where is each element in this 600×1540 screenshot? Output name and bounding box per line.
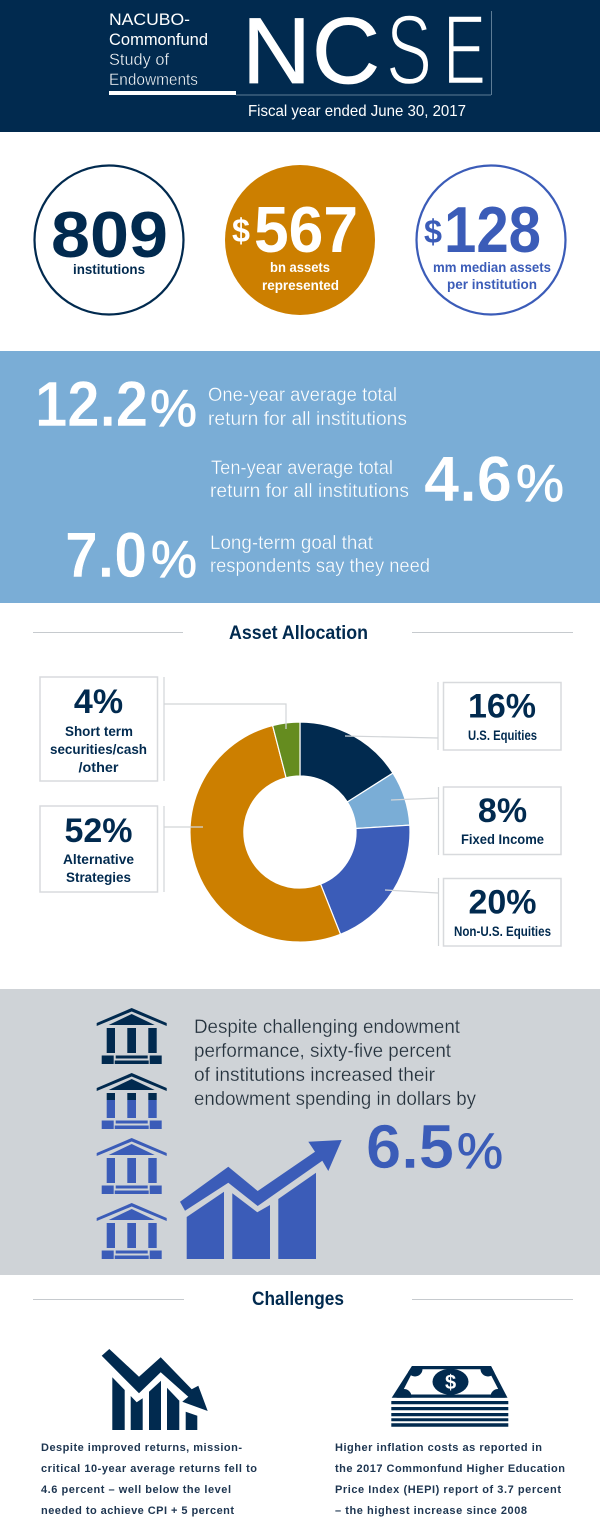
panel: returns [0, 351, 600, 603]
text: ten-year average [210, 458, 409, 502]
callout: 4% short term [40, 677, 158, 781]
text: one-year average: return for all institutions [208, 409, 407, 430]
stat: 6.5%: 6.5 [366, 1113, 454, 1182]
stat: 7.0% [65, 519, 197, 591]
stat: 12.2%: 12.2 [35, 368, 148, 440]
text: challenge one: 4.6 percent – well below the level [41, 1484, 231, 1496]
text: challenge two: Price Index (HEPI) report of 3.7 percent [335, 1484, 561, 1496]
callout: 52% alternative strategies: Alternative [63, 851, 134, 867]
stat circle: $567 bn assets: represented [262, 277, 339, 293]
heading: Challenges: Challenges [252, 1289, 344, 1310]
text: spending statement: Despite challenging endowment [194, 1016, 461, 1038]
icon: building blue [97, 1138, 167, 1194]
header NCSE logotype: C [312, 0, 380, 103]
stat circle: $128 mm median assets: mm median assets [433, 259, 551, 275]
stat: 6.5%: % [457, 1123, 503, 1179]
stat circle: 809 institutions: 809 [51, 198, 168, 271]
icon: falling chart with arrow [102, 1349, 208, 1430]
text: challenge one: critical 10-year average returns fell to [41, 1463, 257, 1475]
callout: 8% fixed income: 8% [478, 792, 527, 830]
stat: 7.0%: % [151, 531, 197, 589]
callout: 52% alternative strategies [40, 806, 158, 892]
stat circle: 809 institutions: institutions [73, 261, 145, 277]
icon: stack of money [391, 1362, 508, 1427]
stat circle: $567 bn assets: bn assets [270, 259, 330, 275]
callout: 4% short term: 4% [74, 683, 123, 721]
text: ten-year average: Ten-year average total [211, 458, 393, 479]
header study name: Study of [109, 50, 169, 69]
callout: 52% alternative strategies: Strategies [66, 869, 131, 885]
stat circle: $567 bn assets: 567 [254, 193, 358, 266]
leader lines [164, 677, 438, 946]
text: ten-year average: return for all institutions [210, 481, 409, 502]
callout: 20% non-US equities [444, 878, 561, 946]
stat circle: $128 mm median assets: per institution [447, 276, 537, 292]
stat circle: $567 bn assets: $ [232, 212, 250, 249]
header fiscal year: Fiscal year ended June 30, 2017 [248, 103, 466, 120]
header NCSE logotype [242, 0, 486, 105]
callout: 16% US equities: 16% [468, 688, 536, 726]
stat circle: $128 mm median assets: 128 [444, 193, 541, 266]
header NCSE logotype: N [242, 0, 311, 103]
stat circle: 809 institutions [34, 166, 184, 314]
header study name: Endowments [109, 70, 198, 89]
stat: 4.6%: 4.6 [424, 443, 512, 515]
icon: rising chart with arrow [180, 1140, 342, 1259]
text: spending statement: of institutions increased their [194, 1064, 435, 1086]
stat circle: $128 mm median assets [416, 166, 566, 314]
icon: building blue bottom [97, 1203, 167, 1259]
text: long-term goal [210, 533, 430, 577]
icon: building all navy [97, 1008, 167, 1064]
text: challenge one: needed to achieve CPI + 5 percent [41, 1505, 234, 1517]
stat: 7.0%: 7.0 [65, 519, 147, 591]
header study name [109, 10, 208, 89]
text: challenge two: the 2017 Commonfund Higher Education [335, 1463, 565, 1475]
icon: building navy and blue [97, 1073, 167, 1129]
header study name: NACUBO- [109, 10, 190, 29]
heading: Asset Allocation: Asset Allocation [229, 623, 368, 644]
stat: 4.6% [424, 443, 564, 515]
text: challenge two [335, 1442, 565, 1517]
donut chart: asset allocation [190, 722, 410, 942]
text: challenge two: Higher inflation costs as reported in [335, 1442, 542, 1454]
text: one-year average: One-year average total [208, 385, 397, 406]
stat: 4.6%: % [516, 455, 564, 513]
callout: 4% short term: securities/cash [50, 741, 147, 757]
callout: 4% short term: Short term [65, 723, 133, 739]
callout: 8% fixed income [444, 787, 561, 854]
callout: 52% alternative strategies: 52% [64, 812, 133, 850]
header study name: Commonfund [109, 30, 208, 49]
stat: 12.2%: % [150, 380, 197, 438]
text: challenge one: Despite improved returns, mission- [41, 1442, 242, 1454]
text: one-year average [208, 385, 407, 430]
stat circle: $128 mm median assets: $ [424, 213, 442, 250]
text: spending statement: performance, sixty-five percent [194, 1040, 452, 1062]
icon: stack of money: $ [445, 1372, 456, 1394]
text: long-term goal: Long-term goal that [210, 533, 374, 554]
text: long-term goal: respondents say they need [210, 556, 430, 577]
callout: 4% short term: /other [78, 759, 119, 775]
callout: 20% non-US equities: 20% [468, 884, 537, 922]
callout: 16% US equities [444, 682, 561, 750]
text: challenge one [41, 1442, 257, 1517]
text: spending statement: endowment spending in dollars by [194, 1088, 476, 1110]
callout: 16% US equities: U.S. Equities [468, 727, 537, 743]
panel: endowment spending [0, 989, 600, 1275]
header banner [0, 0, 600, 132]
stat circle: $567 bn assets [225, 165, 375, 315]
callout: 20% non-US equities: Non-U.S. Equities [454, 923, 551, 939]
callout: 8% fixed income: Fixed Income [461, 831, 544, 847]
stat: 6.5% [366, 1113, 503, 1182]
text: challenge two: – the highest increase since 2008 [335, 1505, 527, 1517]
text: spending statement [194, 1016, 476, 1110]
